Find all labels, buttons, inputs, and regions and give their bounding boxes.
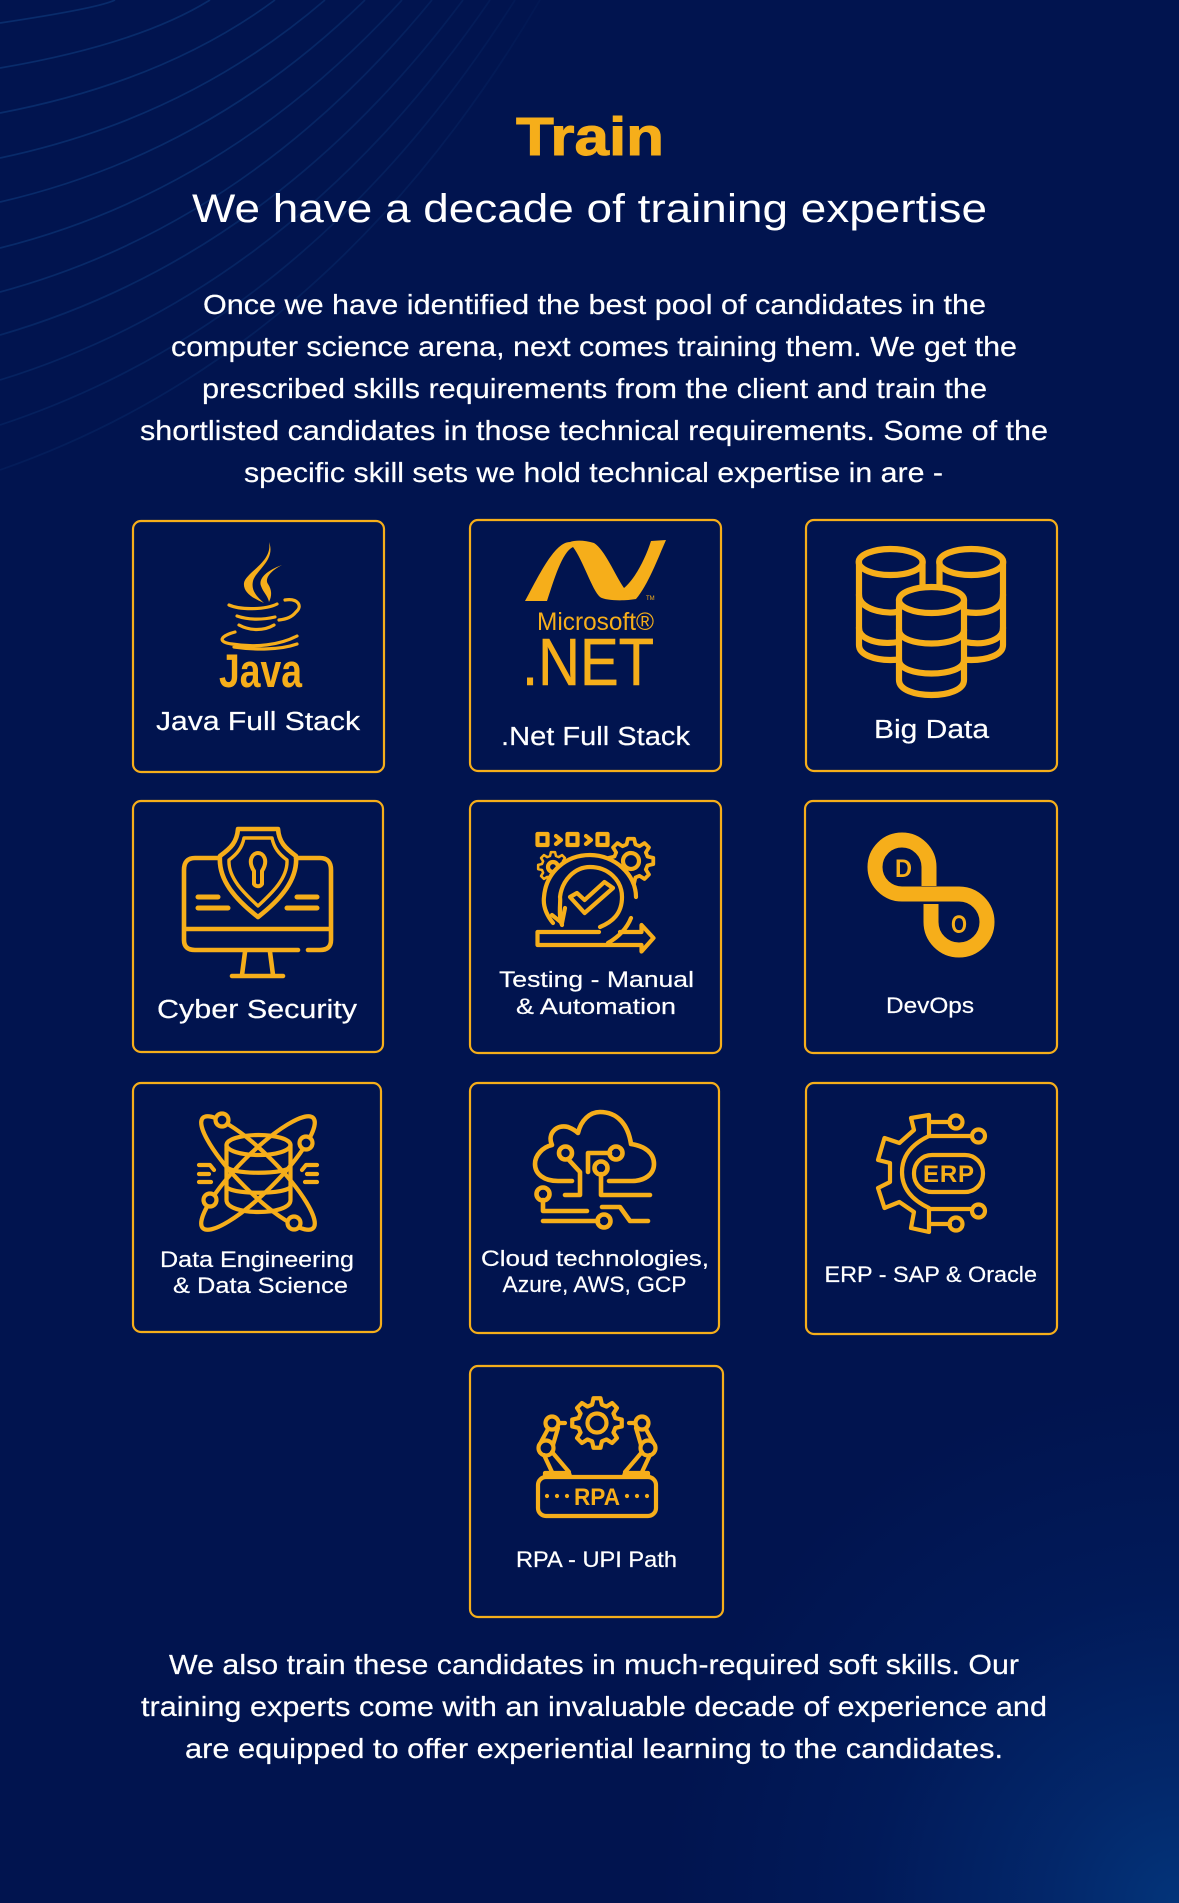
intro paragraph: computer science arena, next comes training them. We get the <box>171 331 1017 362</box>
text: RPA: RPA <box>574 1484 620 1511</box>
panel: Data Engineering & Data Science <box>133 1083 381 1332</box>
panel: RPA - UPI Path <box>470 1366 723 1617</box>
closing paragraph <box>141 1649 1047 1764</box>
label: & Automation <box>516 994 676 1019</box>
intro paragraph: prescribed skills requirements from the client and train the <box>202 373 987 404</box>
intro paragraph: shortlisted candidates in those technical requirements. Some of the <box>140 415 1048 446</box>
label: Testing - Manual <box>499 967 694 992</box>
icon: Microsoft .NET logo: Microsoft® <box>537 608 655 636</box>
title: Train <box>516 107 664 167</box>
label <box>499 967 694 1019</box>
icon: DevOps loop: O <box>951 911 967 939</box>
closing paragraph: training experts come with an invaluable decade of experience and <box>141 1691 1047 1722</box>
label: Java Full Stack <box>156 708 360 736</box>
label: DevOps <box>886 993 974 1018</box>
label: Azure, AWS, GCP <box>502 1272 686 1297</box>
icon: testing cycle <box>538 834 654 952</box>
panel: .Net Full Stack <box>470 520 721 771</box>
label: Data Engineering <box>160 1247 354 1272</box>
icon: Java logo <box>219 542 303 697</box>
label <box>481 1246 709 1297</box>
intro paragraph <box>140 289 1048 488</box>
label: Cyber Security <box>157 996 357 1024</box>
icon: Microsoft .NET logo: TM <box>646 596 655 602</box>
intro paragraph: Once we have identified the best pool of candidates in the <box>203 289 986 320</box>
panel: ERP - SAP & Oracle <box>806 1083 1057 1334</box>
icon: database cylinders <box>859 549 1003 695</box>
panel: DevOps <box>805 801 1057 1053</box>
icon: database with orbits <box>189 1104 327 1242</box>
intro paragraph: specific skill sets we hold technical expertise in are - <box>244 457 943 488</box>
icon: RPA robot arms <box>538 1398 656 1516</box>
icon: monitor with shield <box>184 829 331 976</box>
closing paragraph: We also train these candidates in much-required soft skills. Our <box>169 1649 1019 1680</box>
icon: cloud circuit <box>535 1112 654 1228</box>
icon: ERP gear <box>878 1115 985 1232</box>
icon: Java logo: Java <box>219 644 303 697</box>
text: ERP: ERP <box>923 1161 974 1188</box>
panel: Cyber Security <box>133 801 383 1052</box>
panel: Big Data <box>806 520 1057 771</box>
label: & Data Science <box>173 1273 348 1298</box>
subtitle: We have a decade of training expertise <box>192 187 987 231</box>
label: RPA - UPI Path <box>516 1547 677 1572</box>
label: ERP - SAP & Oracle <box>824 1262 1037 1287</box>
panel: Java Full Stack <box>133 521 384 772</box>
label <box>160 1247 354 1298</box>
label: Cloud technologies, <box>481 1246 709 1271</box>
closing paragraph: are equipped to offer experiential learning to the candidates. <box>185 1733 1003 1764</box>
panel: Cloud technologies <box>470 1083 719 1333</box>
icon: DevOps loop: D <box>895 855 912 883</box>
label: Big Data <box>874 716 990 744</box>
panel: Testing - Manual & Automation <box>470 801 721 1053</box>
icon: Microsoft .NET logo: .NET <box>522 625 654 700</box>
icon: Microsoft .NET logo <box>522 540 666 700</box>
icon: DevOps loop <box>875 840 987 950</box>
label: .Net Full Stack <box>501 723 690 751</box>
